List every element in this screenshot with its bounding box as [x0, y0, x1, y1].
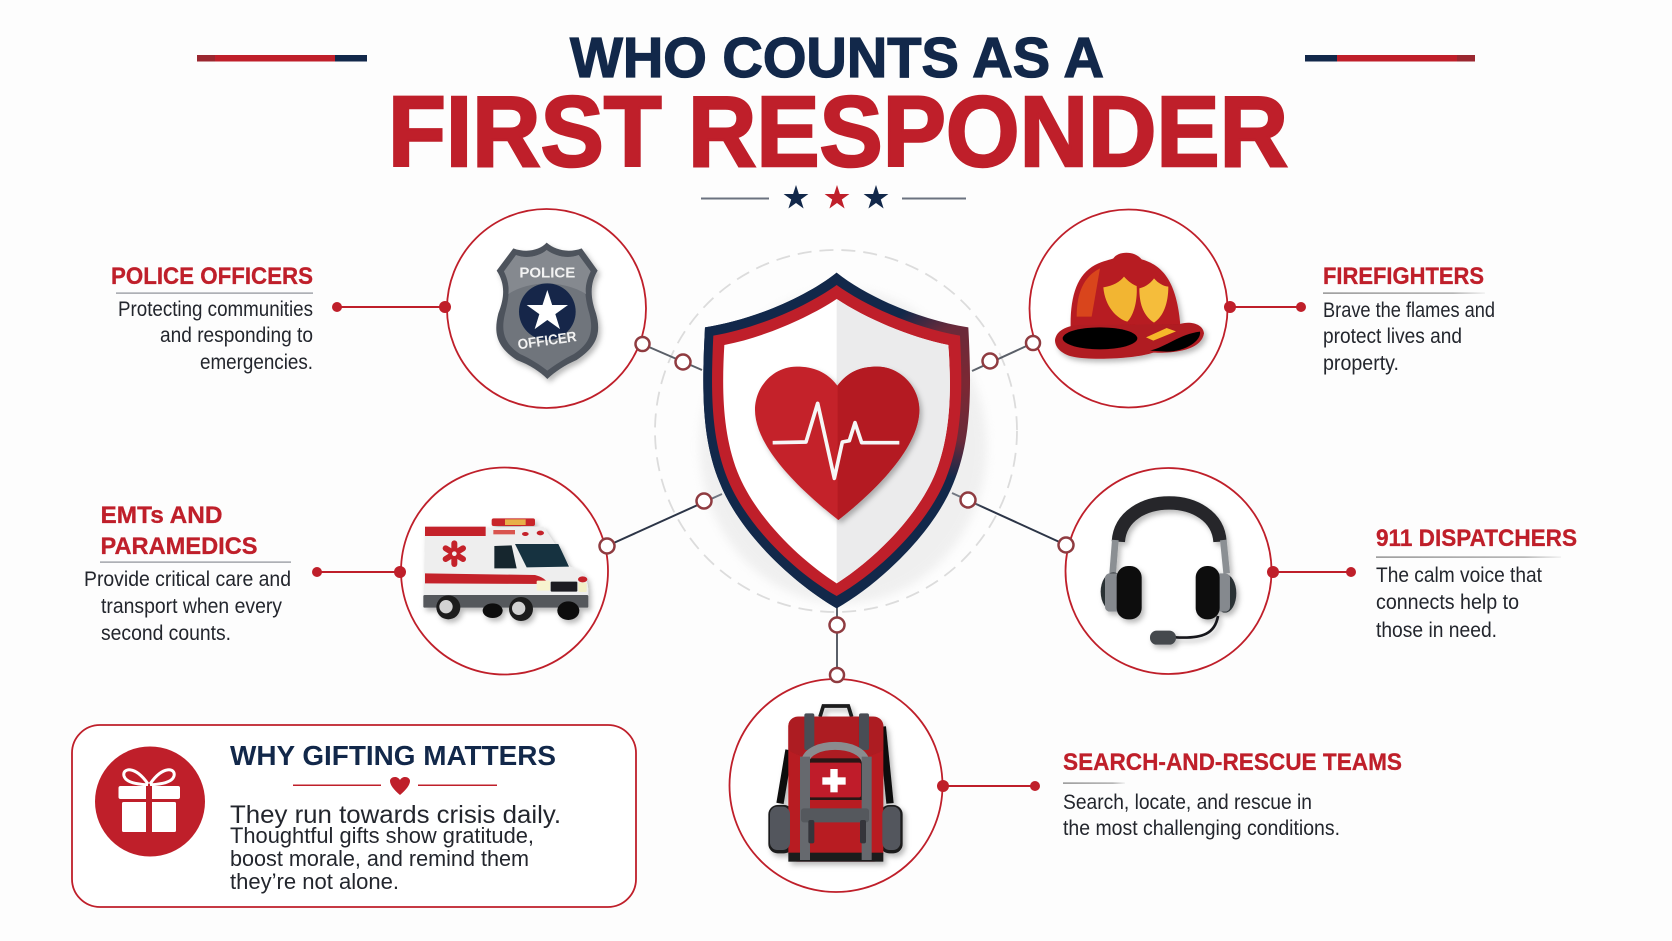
- firefighter circle: [1030, 210, 1228, 408]
- police description: Protecting communities: [118, 298, 313, 321]
- title: [388, 26, 1288, 188]
- dispatcher connector: [1267, 566, 1356, 578]
- title line two: FIRST RESPONDER: [388, 76, 1288, 188]
- callout text: they’re not alone.: [230, 869, 399, 894]
- badge text: OFFICER: [517, 329, 578, 353]
- police circle: [447, 209, 646, 408]
- panel: firefighters: [1030, 210, 1495, 408]
- dispatcher description: connects help to: [1376, 591, 1519, 614]
- dispatcher description: [1376, 564, 1542, 642]
- police description: emergencies.: [200, 351, 313, 374]
- firefighter description: property.: [1323, 352, 1399, 375]
- firefighter description: protect lives and: [1323, 325, 1462, 348]
- icon: gift: [95, 746, 205, 856]
- callout text: [230, 801, 561, 894]
- callout text: They run towards crisis daily.: [230, 801, 561, 829]
- open connector nodes: [600, 336, 1074, 682]
- badge text: POLICE: [519, 265, 575, 281]
- EMT label: [100, 502, 258, 560]
- panel: EMTs and paramedics: [84, 468, 608, 674]
- dispatcher circle: [1066, 468, 1272, 674]
- left header bar: [197, 55, 367, 62]
- EMT circle: [401, 468, 608, 674]
- icon: ambulance: [423, 518, 588, 621]
- EMT description: second counts.: [101, 622, 231, 645]
- icon: headset: [1101, 503, 1236, 645]
- EMT connector: [312, 566, 406, 578]
- EMT description: [84, 568, 291, 645]
- rescue description: the most challenging conditions.: [1063, 817, 1340, 840]
- icon: fire helmet: [1055, 253, 1204, 359]
- callout card: [72, 725, 636, 907]
- firefighter label: FIREFIGHTERS: [1323, 263, 1484, 290]
- icon: police badge: [496, 243, 598, 379]
- callout heading: WHY GIFTING MATTERS: [230, 740, 556, 771]
- dispatcher description: those in need.: [1376, 619, 1497, 642]
- icon: heart: [755, 367, 919, 520]
- title line one: WHO COUNTS AS A: [570, 26, 1104, 90]
- EMT label: EMTs AND: [100, 502, 222, 529]
- EMT label: PARAMEDICS: [100, 533, 258, 560]
- panel: 911 dispatchers: [1066, 468, 1577, 674]
- dashed ring behind shield: [655, 250, 1017, 612]
- callout: why gifting matters: [72, 725, 636, 907]
- callout divider with heart: [293, 777, 497, 795]
- rescue connector: [937, 780, 1040, 792]
- callout text: boost morale, and remind them: [230, 846, 529, 871]
- panel: search and rescue: [730, 679, 1402, 892]
- connector lines to shield: [607, 343, 1066, 675]
- police label: POLICE OFFICERS: [111, 263, 313, 290]
- rescue label: SEARCH-AND-RESCUE TEAMS: [1063, 749, 1402, 776]
- firefighter description: Brave the flames and: [1323, 299, 1495, 322]
- star divider: [701, 185, 966, 208]
- police connector: [332, 301, 451, 313]
- callout text: Thoughtful gifts show gratitude,: [230, 823, 534, 848]
- dispatcher description: The calm voice that: [1376, 564, 1542, 587]
- rescue description: Search, locate, and rescue in: [1063, 791, 1312, 814]
- EMT description: Provide critical care and: [84, 568, 291, 591]
- dispatcher label: 911 DISPATCHERS: [1376, 525, 1577, 552]
- icon: rescue backpack: [768, 706, 903, 862]
- central shield with heart: [700, 273, 987, 608]
- police description: [118, 298, 313, 374]
- police description: and responding to: [160, 324, 313, 347]
- right header bar: [1305, 55, 1475, 62]
- rescue description: [1063, 791, 1340, 840]
- EMT description: transport when every: [101, 595, 282, 618]
- panel: police officers: [111, 209, 646, 408]
- firefighter connector: [1224, 301, 1306, 313]
- firefighter description: [1323, 299, 1495, 375]
- rescue circle: [730, 679, 942, 892]
